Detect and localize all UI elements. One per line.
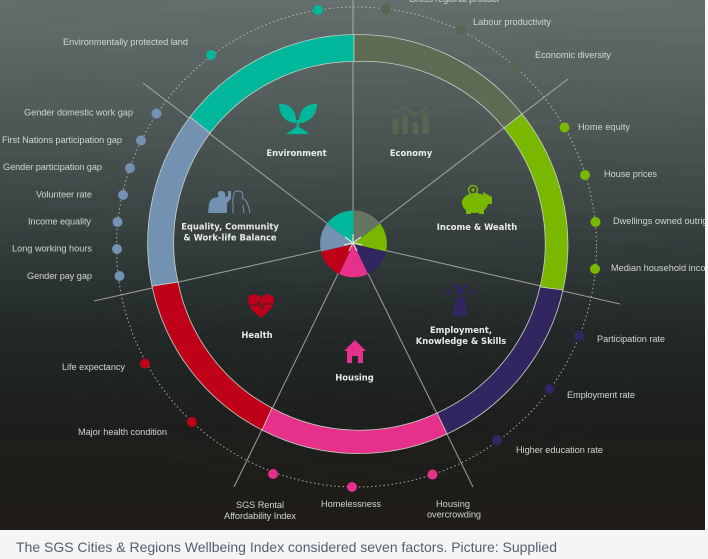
ring segment: employment (437, 287, 563, 434)
indicator labels: Higher education rate (516, 445, 603, 455)
indicator labels: overcrowding (427, 510, 481, 520)
icon: people high five (208, 191, 250, 213)
indicator labels: Participation rate (597, 334, 665, 344)
category titles: Knowledge & Skills (416, 336, 506, 346)
category titles: Income & Wealth (437, 222, 517, 232)
indicator labels: Life expectancy (62, 362, 125, 372)
indicator labels: Home equity (578, 122, 630, 132)
category titles: Equality, Community (181, 222, 279, 232)
category titles (181, 148, 517, 382)
icon: heart (248, 294, 274, 318)
outer ring segments (148, 34, 568, 454)
indicator labels: Long working hours (12, 244, 92, 254)
ring segment: income and wealth (504, 114, 568, 290)
indicator labels: Employment rate (567, 390, 635, 400)
icon: economy bars (392, 107, 428, 134)
icon: plant (279, 104, 317, 134)
spokes (94, 0, 620, 487)
icon: employment (446, 284, 474, 316)
indicator labels: Income equality (28, 216, 91, 226)
ring segment: health (152, 282, 272, 430)
ring segment: economy (354, 34, 522, 128)
dotted outer ring (116, 7, 596, 487)
indicator labels: SGS Rental (236, 500, 284, 510)
indicator dots (112, 4, 600, 492)
ring segment: environment (190, 34, 354, 133)
ring segment: equality (148, 117, 210, 286)
indicator labels: Labour productivity (473, 17, 551, 27)
indicator labels: Homelessness (321, 499, 381, 509)
indicator labels: Gender pay gap (27, 271, 92, 281)
category titles: & Work-life Balance (183, 232, 277, 242)
category titles: Health (241, 330, 273, 340)
indicator labels: First Nations participation gap (2, 135, 122, 145)
indicator labels: Affordability Index (224, 511, 296, 521)
ring segment: housing (262, 408, 447, 454)
centre pie (320, 210, 387, 277)
category titles: Housing (335, 372, 374, 382)
caption (0, 530, 708, 559)
indicator labels: Housing (436, 499, 470, 509)
indicator labels: House prices (604, 169, 657, 179)
icon: house (344, 340, 366, 363)
indicator labels: Major health condition (78, 427, 167, 437)
indicator labels: Volunteer rate (36, 190, 92, 200)
indicator labels: Gender domestic work gap (24, 108, 133, 118)
category titles: Environment (266, 148, 327, 158)
indicator labels: Economic diversity (535, 50, 611, 60)
category titles: Employment, (430, 325, 492, 335)
icon: piggy bank (461, 186, 492, 214)
indicator labels: Environmentally protected land (63, 37, 188, 47)
category titles: Economy (390, 148, 433, 158)
indicator labels: Gender participation gap (3, 162, 102, 172)
caption: The SGS Cities & Regions Wellbeing Index considered seven factors. Picture: Supplied (16, 539, 557, 555)
